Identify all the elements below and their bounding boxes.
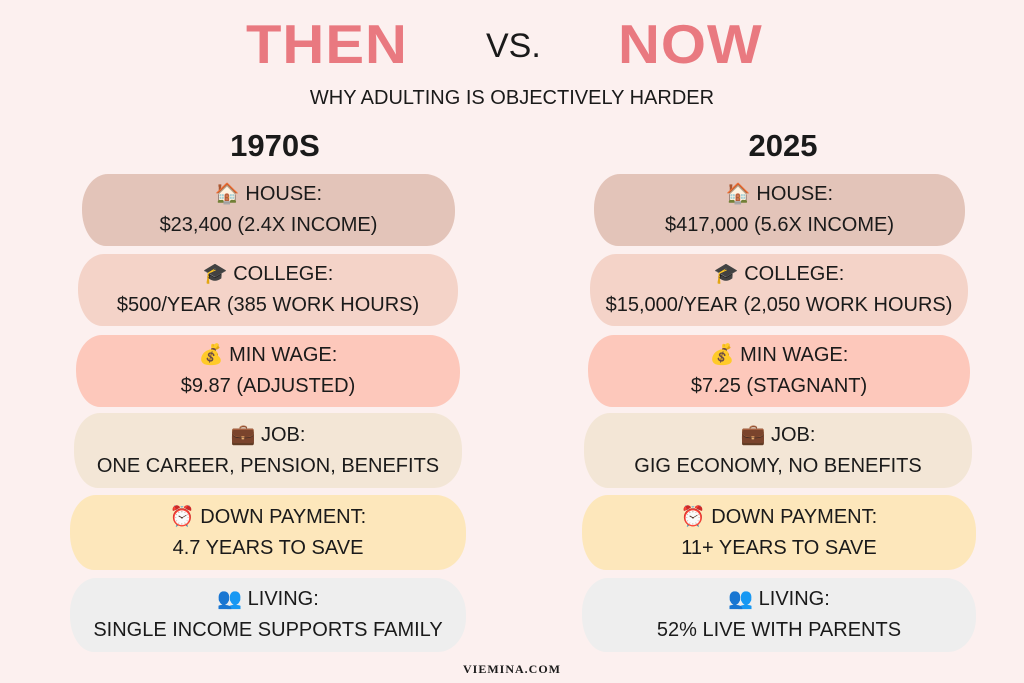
card: house 1970s: [82, 174, 455, 246]
card: house 2025: 🏠 HOUSE:: [726, 183, 833, 205]
card: house 2025: $417,000 (5.6X INCOME): [665, 214, 894, 236]
card: min wage 2025: [588, 335, 970, 407]
card: college 1970s: [78, 254, 458, 326]
card: living 2025: [582, 578, 976, 652]
card: house 1970s: 🏠 HOUSE:: [215, 183, 322, 205]
card: min wage 1970s: 💰 MIN WAGE:: [199, 344, 337, 366]
card: job 2025: 💼 JOB:: [741, 424, 815, 446]
card: job 1970s: [74, 413, 462, 488]
card: down payment 1970s: [70, 495, 466, 570]
card: job 2025: GIG ECONOMY, NO BENEFITS: [634, 454, 922, 476]
title: NOW: NOW: [618, 14, 763, 75]
title: THEN: THEN: [246, 14, 408, 75]
heading: 1970s: 1970S: [230, 128, 320, 163]
card: min wage 1970s: [76, 335, 460, 407]
card: house 1970s: $23,400 (2.4X INCOME): [160, 214, 377, 236]
card: college 2025: $15,000/YEAR (2,050 WORK HOURS): [606, 294, 952, 316]
card: down payment 2025: [582, 495, 976, 570]
heading: 2025: 2025: [749, 128, 817, 163]
subtitle: WHY ADULTING IS OBJECTIVELY HARDER: [310, 87, 714, 109]
card: living 1970s: 👥 LIVING:: [217, 588, 319, 610]
card: job 2025: [584, 413, 972, 488]
card: down payment 2025: 11+ YEARS TO SAVE: [681, 536, 877, 558]
card: down payment 1970s: 4.7 YEARS TO SAVE: [173, 536, 363, 558]
card: min wage 2025: $7.25 (STAGNANT): [691, 375, 867, 397]
card: house 2025: [594, 174, 965, 246]
card: job 1970s: 💼 JOB:: [231, 424, 305, 446]
footer: source: VIEMINA.COM: [463, 662, 561, 676]
card: college 1970s: 🎓 COLLEGE:: [203, 263, 333, 285]
card: living 2025: 👥 LIVING:: [728, 588, 830, 610]
card: job 1970s: ONE CAREER, PENSION, BENEFITS: [97, 454, 439, 476]
card: college 1970s: $500/YEAR (385 WORK HOURS): [117, 294, 419, 316]
card: living 2025: 52% LIVE WITH PARENTS: [657, 619, 901, 641]
card: living 1970s: [70, 578, 466, 652]
card: down payment 2025: ⏰ DOWN PAYMENT:: [681, 506, 877, 528]
card: min wage 2025: 💰 MIN WAGE:: [710, 344, 848, 366]
card: college 2025: [590, 254, 968, 326]
card: down payment 1970s: ⏰ DOWN PAYMENT:: [170, 506, 366, 528]
card: living 1970s: SINGLE INCOME SUPPORTS FAMILY: [93, 619, 443, 641]
card: college 2025: 🎓 COLLEGE:: [714, 263, 844, 285]
card: min wage 1970s: $9.87 (ADJUSTED): [181, 375, 355, 397]
title: vs.: VS.: [486, 27, 541, 65]
